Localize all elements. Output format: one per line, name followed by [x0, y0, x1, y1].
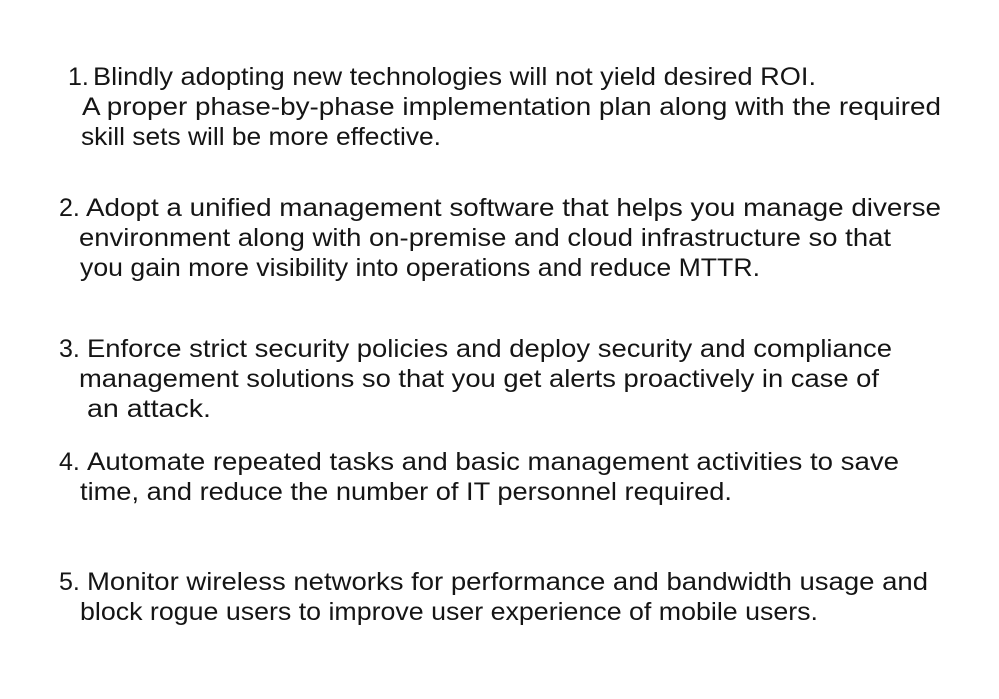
item 1: adopting technologies: skill sets will be more effective.: [81, 123, 441, 151]
item 4: automation: 4.: [59, 448, 80, 476]
item 2: unified management software: [59, 194, 941, 282]
item 1: adopting technologies: 1.: [68, 63, 89, 91]
item 3: security policies: an attack.: [87, 395, 211, 423]
item 1: adopting technologies: [68, 63, 941, 151]
item 4: automation: [59, 448, 899, 506]
item 2: unified management software: 2.: [59, 194, 80, 222]
item 5: wireless monitoring: Monitor wireless networks for performance and bandwidth usage and: [87, 568, 928, 596]
item 1: adopting technologies: Blindly adopting new technologies will not yield desired ROI.: [93, 63, 816, 91]
item 2: unified management software: Adopt a unified management software that helps you manage diverse: [86, 194, 941, 222]
item 2: unified management software: environment along with on-premise and cloud infrastructure so that: [79, 224, 891, 252]
item 3: security policies: management solutions so that you get alerts proactively in case of: [79, 365, 879, 393]
item 5: wireless monitoring: [59, 568, 928, 626]
item 4: automation: Automate repeated tasks and basic management activities to save: [87, 448, 899, 476]
item 4: automation: time, and reduce the number of IT personnel required.: [80, 478, 732, 506]
item 2: unified management software: you gain more visibility into operations and reduce MTTR.: [80, 254, 760, 282]
item 3: security policies: [59, 335, 892, 423]
item 5: wireless monitoring: 5.: [59, 568, 80, 596]
item 5: wireless monitoring: block rogue users to improve user experience of mobile users.: [80, 598, 818, 626]
item 3: security policies: Enforce strict security policies and deploy security and compliance: [87, 335, 892, 363]
item 3: security policies: 3.: [59, 335, 80, 363]
item 1: adopting technologies: A proper phase-by-phase implementation plan along with the required: [82, 93, 941, 121]
